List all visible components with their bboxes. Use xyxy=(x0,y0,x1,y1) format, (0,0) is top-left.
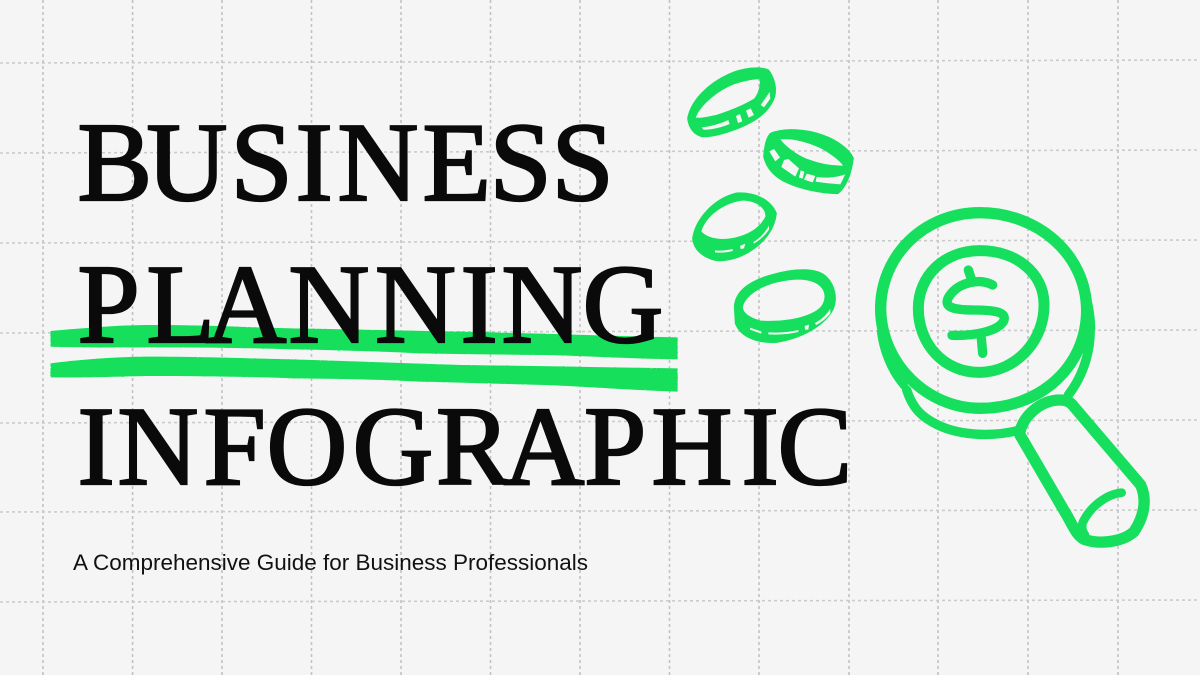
subtitle: A Comprehensive Guide for Business Professionals xyxy=(73,550,588,575)
inner circle xyxy=(918,251,1044,372)
lens thickness rim xyxy=(907,323,1090,434)
title xyxy=(78,101,852,509)
title line: BUSINESS: BUSINESS xyxy=(78,101,614,225)
title line: PLANNING: PLANNING xyxy=(78,243,663,367)
icon: magnifying glass with dollar sign xyxy=(877,213,1144,542)
coin 1 xyxy=(688,69,775,136)
icon: falling coins xyxy=(688,69,853,342)
dollar sign xyxy=(947,270,1004,353)
handle end cap xyxy=(1082,493,1122,535)
green highlighter underline xyxy=(51,325,678,392)
lens outer ring xyxy=(881,213,1087,408)
title line: INFOGRAPHIC: INFOGRAPHIC xyxy=(78,385,852,509)
coin 2 xyxy=(764,130,853,193)
coin 3 xyxy=(693,194,776,260)
lens thick lower-left wedge xyxy=(877,330,915,401)
coin 4 xyxy=(735,270,835,342)
handle xyxy=(1020,400,1144,542)
lens thick right edge xyxy=(1055,235,1095,330)
